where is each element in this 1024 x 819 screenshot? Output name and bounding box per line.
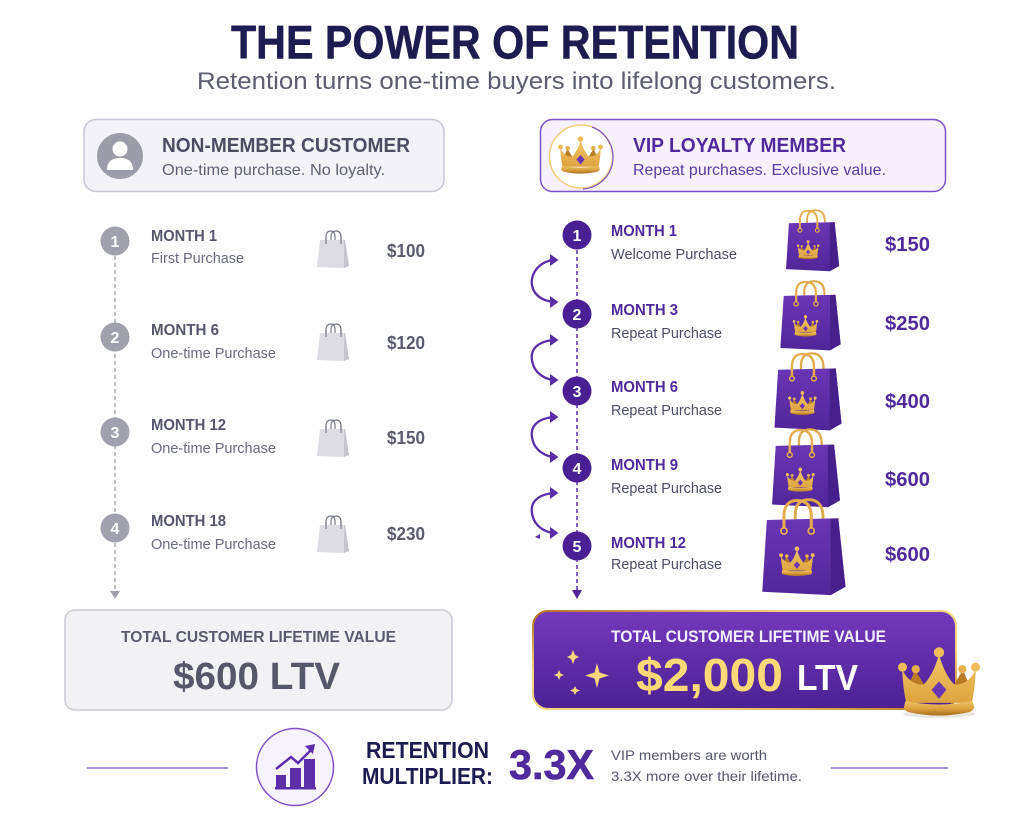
step 2 xyxy=(562,281,930,350)
LTV value: $2,000 xyxy=(636,649,783,701)
step 2: One-time Purchase xyxy=(151,346,276,362)
step 2 xyxy=(100,322,425,362)
icon: sparkles xyxy=(554,650,609,695)
multiplier value: 3.3X xyxy=(509,741,594,788)
step 1 xyxy=(562,210,930,271)
step 3 xyxy=(100,417,425,457)
step 2: MONTH 3 xyxy=(611,302,678,319)
multiplier label: RETENTION xyxy=(366,737,489,763)
panel: non-member header xyxy=(84,120,444,192)
LTV label: TOTAL CUSTOMER LIFETIME VALUE xyxy=(121,629,396,646)
step 2: 2 xyxy=(111,330,120,347)
step 5: 5 xyxy=(573,539,582,556)
step 3: 3 xyxy=(111,425,120,442)
step 4: MONTH 9 xyxy=(611,457,678,474)
step 4: One-time Purchase xyxy=(151,537,276,553)
panel: non-member LTV xyxy=(65,610,452,710)
step 1: 1 xyxy=(573,228,582,245)
step 2: Repeat Purchase xyxy=(611,326,722,342)
step 1: MONTH 1 xyxy=(151,228,217,245)
panel: VIP header xyxy=(540,120,946,192)
icon: avatar xyxy=(97,133,143,179)
multiplier label xyxy=(362,737,493,789)
step 4 xyxy=(100,513,425,553)
step 5: $600 xyxy=(885,544,930,566)
step 1: First Purchase xyxy=(151,251,244,267)
step 4: 4 xyxy=(111,521,120,538)
step 2: $250 xyxy=(885,313,930,335)
title: THE POWER OF RETENTION xyxy=(231,16,799,68)
retention multiplier xyxy=(87,728,948,806)
step 1: Welcome Purchase xyxy=(611,247,737,263)
step 4: $600 xyxy=(885,469,930,491)
step 1 xyxy=(100,226,425,268)
loop arrows xyxy=(532,254,558,539)
non-member tagline: One-time purchase. No loyalty. xyxy=(162,162,385,179)
VIP heading: VIP LOYALTY MEMBER xyxy=(633,134,846,157)
icon: crown badge xyxy=(550,125,613,189)
LTV suffix: LTV xyxy=(797,657,858,698)
step 5 xyxy=(562,500,930,595)
step 2: $120 xyxy=(387,333,425,353)
step 3: MONTH 12 xyxy=(151,417,226,434)
LTV value: $600 LTV xyxy=(173,656,341,698)
multiplier label: MULTIPLIER: xyxy=(362,763,493,789)
multiplier note xyxy=(611,747,802,784)
step 4: Repeat Purchase xyxy=(611,481,722,497)
step 4: MONTH 18 xyxy=(151,513,226,530)
step 5: MONTH 12 xyxy=(611,535,686,552)
non-member timeline xyxy=(100,226,425,599)
step 3: One-time Purchase xyxy=(151,441,276,457)
icon: crown xyxy=(898,647,980,718)
step 3: $400 xyxy=(885,391,930,413)
step 1: $150 xyxy=(885,234,930,256)
LTV label: TOTAL CUSTOMER LIFETIME VALUE xyxy=(611,628,886,646)
step 1: 1 xyxy=(111,234,120,251)
step 4: $230 xyxy=(387,524,425,544)
step 1: $100 xyxy=(387,241,425,261)
step 3 xyxy=(562,353,930,430)
step 3: MONTH 6 xyxy=(611,379,678,396)
step 2: 2 xyxy=(573,307,582,324)
VIP tagline: Repeat purchases. Exclusive value. xyxy=(633,162,886,179)
step 4 xyxy=(562,429,930,507)
VIP timeline xyxy=(532,210,930,599)
non-member heading: NON-MEMBER CUSTOMER xyxy=(162,134,410,157)
icon: growth chart xyxy=(256,728,334,806)
multiplier note: 3.3X more over their lifetime. xyxy=(611,768,802,784)
step 1: MONTH 1 xyxy=(611,223,677,240)
panel: VIP LTV xyxy=(533,611,980,718)
subtitle: Retention turns one-time buyers into lifelong customers. xyxy=(197,68,836,95)
step 4: 4 xyxy=(573,461,582,478)
step 3: Repeat Purchase xyxy=(611,403,722,419)
step 3: 3 xyxy=(573,384,582,401)
multiplier note: VIP members are worth xyxy=(611,747,767,763)
step 5: Repeat Purchase xyxy=(611,557,722,573)
step 2: MONTH 6 xyxy=(151,322,219,339)
step 3: $150 xyxy=(387,428,425,448)
